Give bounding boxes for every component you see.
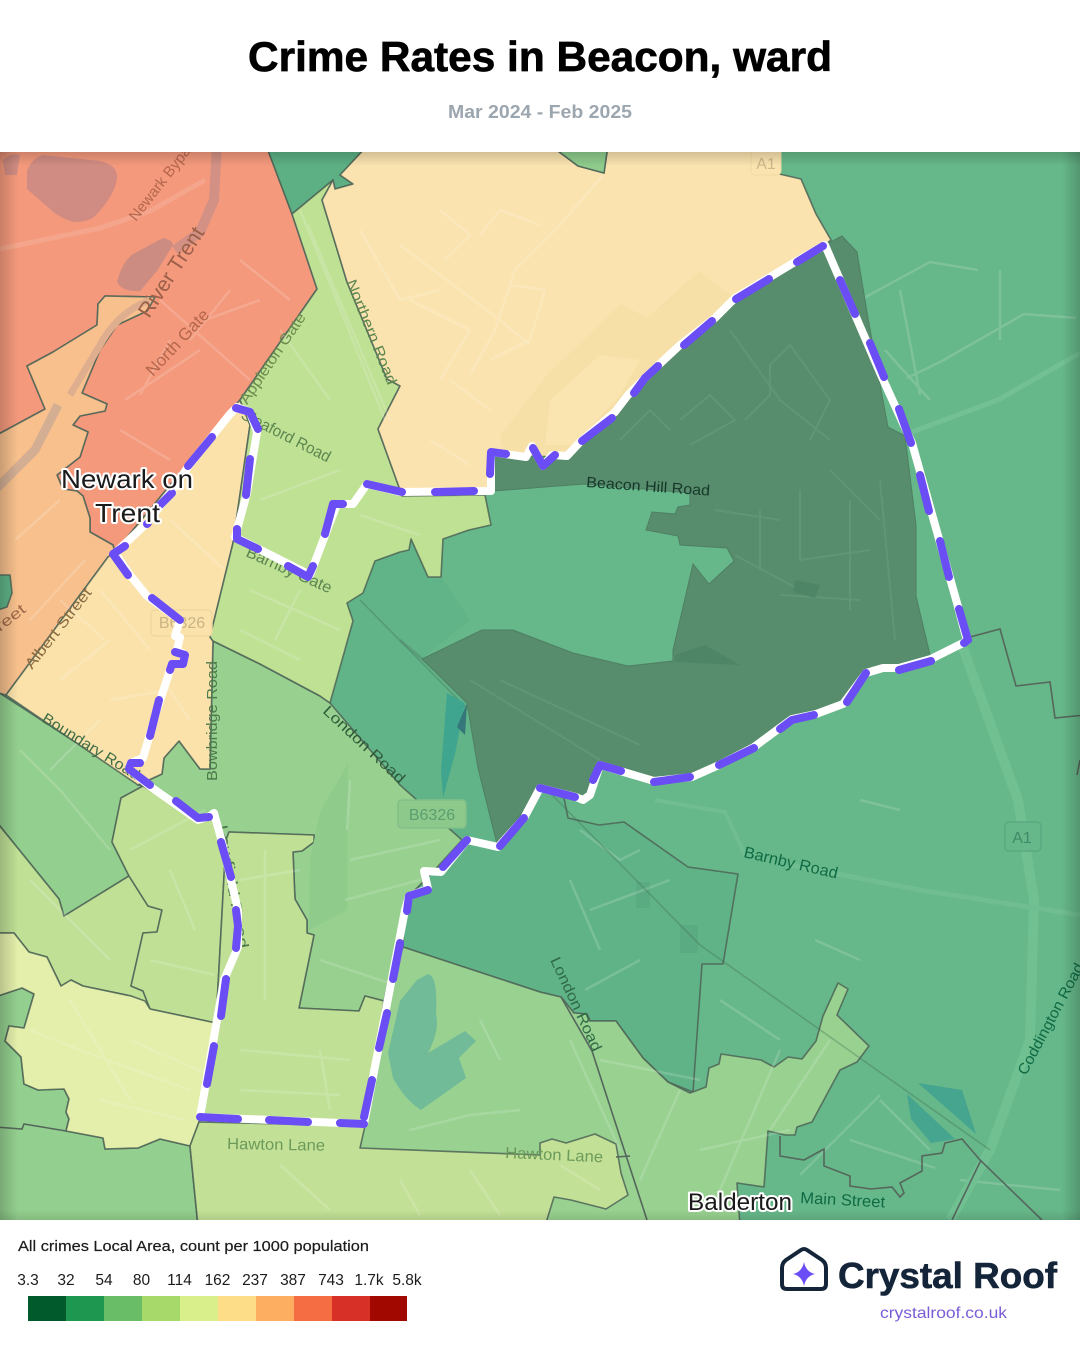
road shield: A1 north: A1 <box>756 156 776 173</box>
area: west light green band <box>0 820 162 1009</box>
label: London Road south: London Road <box>546 955 605 1054</box>
legend values: 1.7k <box>354 1272 384 1289</box>
wordmark: Crystal Roof <box>838 1255 1058 1296</box>
legend values: 114 <box>167 1272 192 1289</box>
label: Hawton Lane west: Hawton Lane <box>227 1136 325 1155</box>
legend values: 162 <box>205 1272 230 1289</box>
road shield: B6326 west <box>151 610 212 636</box>
area: south-east mid green <box>190 947 869 1226</box>
water and land-use shapes <box>0 145 976 1143</box>
area: south of ward darker green <box>403 790 738 1092</box>
area: pale yellow town centre <box>6 400 250 785</box>
ward shaded area <box>422 236 931 844</box>
legend values: 54 <box>95 1272 113 1289</box>
town label: Newark on Trent: Trent <box>95 498 161 528</box>
legend colour scale <box>28 1296 407 1321</box>
label: Beacon Hill Road: Beacon Hill Road <box>586 474 711 500</box>
logo: Crystal Roof <box>782 1249 1058 1322</box>
area: bottom-left green <box>0 988 198 1226</box>
area: red north Newark <box>0 145 317 552</box>
area: west-of-ward light green <box>112 786 226 1023</box>
area: light green railway corridor <box>210 180 491 703</box>
area: Hawton Lane yellow-green <box>190 1122 628 1226</box>
ward boundary: purple dashes <box>113 246 968 1124</box>
legend title: All crimes Local Area, count per 1000 population <box>18 1238 369 1255</box>
area: central medium green <box>330 539 497 848</box>
label: London Road north: London Road <box>319 702 408 787</box>
area: pale yellow north-east <box>322 145 831 491</box>
legend values <box>17 1272 422 1289</box>
legend values: 80 <box>133 1272 150 1289</box>
label: Albert Street: Albert Street <box>22 584 96 672</box>
label: Sleaford Road: Sleaford Road <box>238 406 333 466</box>
road shield: A1 east <box>1005 822 1041 851</box>
legend values: 5.8k <box>392 1272 422 1289</box>
road shield: B6326 south: B6326 <box>409 807 455 824</box>
ward boundary: white line <box>115 245 967 1124</box>
town label: Balderton: Balderton <box>688 1189 792 1216</box>
legend values: 743 <box>318 1272 344 1289</box>
label: Main Street: Main Street <box>800 1190 886 1211</box>
map edge vignette <box>0 152 1080 1220</box>
road shield: A1 north <box>751 145 781 175</box>
title: Crime Rates in Beacon, ward <box>248 33 832 80</box>
legend values: 3.3 <box>17 1272 39 1289</box>
area: small green notch at top <box>558 152 608 174</box>
label: North Gate: North Gate <box>142 305 213 380</box>
label: road beside ward: Lowfield Road <box>213 824 252 950</box>
label: River Trent: River Trent <box>134 223 209 322</box>
area: small dark green left edge <box>0 575 12 611</box>
label: Hawton Lane east: Hawton Lane <box>505 1145 604 1166</box>
area: lower-left green <box>0 690 143 916</box>
street network <box>0 175 1076 1215</box>
label: Barnby Gate: Barnby Gate <box>243 544 334 597</box>
area: orange central Newark <box>0 296 155 695</box>
label: Appleton Gate: Appleton Gate <box>236 310 310 407</box>
road shield: A1 east: A1 <box>1012 830 1032 847</box>
label: Bowbridge Road: Bowbridge Road <box>204 661 221 781</box>
road shield: B6326 west: B6326 <box>159 615 205 632</box>
area: mid-light green around London Road <box>138 641 462 1011</box>
legend values: 32 <box>57 1272 75 1289</box>
main roads <box>360 353 1080 1220</box>
boundary lines <box>0 629 1080 1220</box>
legend <box>17 1238 422 1321</box>
road shield: B6326 south <box>398 800 466 828</box>
label: Newark Bypass: Newark Bypass <box>126 131 204 224</box>
town label: Newark on Trent <box>61 464 193 528</box>
label: Northern Road: Northern Road <box>342 277 400 387</box>
website url: crystalroof.co.uk <box>880 1305 1008 1322</box>
area: dark green north <box>268 152 361 214</box>
label: Barnby Road: Barnby Road <box>742 844 839 882</box>
area: pale yellow-green <box>0 933 216 1149</box>
icon: house with star <box>782 1249 826 1289</box>
legend values: 237 <box>242 1272 268 1289</box>
subtitle: date range: Mar 2024 - Feb 2025 <box>448 101 632 122</box>
label: Boundary Road: Boundary Road <box>39 710 143 784</box>
town label: Newark on Trent: Newark on <box>61 464 193 494</box>
legend values: 387 <box>280 1272 306 1289</box>
area: ward southern light green <box>200 832 384 1124</box>
